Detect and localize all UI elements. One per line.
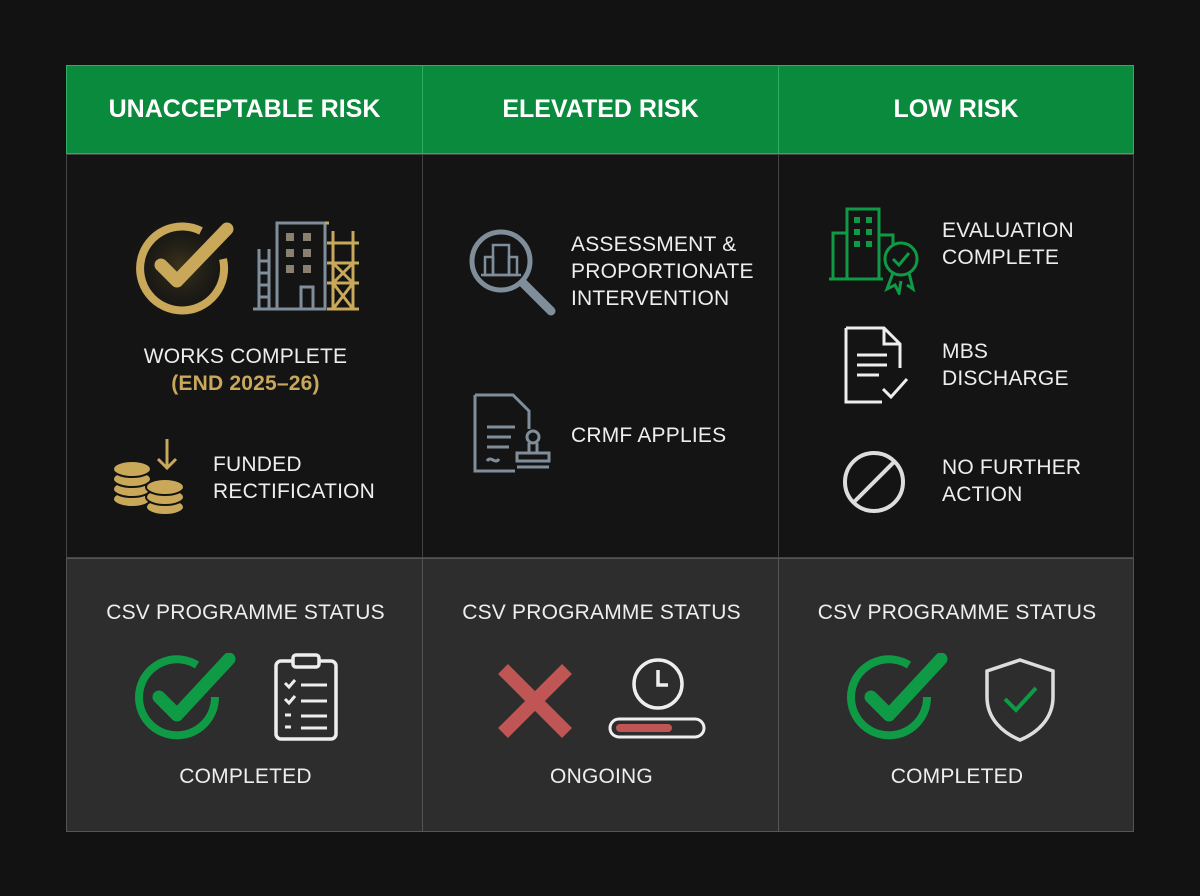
text: mbs discharge [942,340,1069,390]
text: funded rectification: RECTIFICATION [213,480,375,503]
icon: red cross [498,664,572,738]
text: assessment [571,233,754,310]
text: assessment: PROPORTIONATE [571,260,754,283]
panel: status elevated [422,558,779,832]
icon: clipboard [274,653,338,741]
text: funded rectification: FUNDED [213,453,302,476]
header: elevated risk: ELEVATED RISK [502,95,699,123]
icon: document check [844,326,908,404]
text: crmf applies: CRMF APPLIES [571,424,726,447]
text: completed: COMPLETED [179,765,312,788]
panel: low risk [778,154,1134,558]
panel: status low [778,558,1134,832]
header: low risk: LOW RISK [894,95,1018,123]
icon: green check [847,653,948,740]
text: assessment: INTERVENTION [571,287,729,310]
text: mbs discharge: DISCHARGE [942,367,1069,390]
text: funded rectification [213,453,375,503]
icon: no entry [843,451,905,513]
header: unacceptable risk [66,65,423,154]
text: works complete [144,345,347,395]
header: elevated risk [422,65,779,154]
text: no further action: ACTION [942,483,1023,506]
panel: status unacceptable [66,558,423,832]
panel: elevated risk [422,154,779,558]
icon: magnifier building [470,230,556,316]
text: evaluation complete: EVALUATION [942,219,1074,242]
icon: document stamp [474,394,550,472]
text: ongoing: ONGOING [550,765,653,788]
text: mbs discharge: MBS [942,340,988,363]
text: works complete: WORKS COMPLETE [144,345,347,368]
header: unacceptable risk: UNACCEPTABLE RISK [109,95,380,123]
text: status heading: CSV PROGRAMME STATUS [462,601,741,624]
text: no further action: NO FURTHER [942,456,1081,479]
text: completed: COMPLETED [891,765,1023,788]
text: no further action [942,456,1081,506]
text: evaluation complete [942,219,1074,269]
text: works complete: (END 2025–26) [171,372,320,395]
icon: gold check circle [136,222,234,314]
text: assessment: ASSESSMENT & [571,233,736,256]
icon: green building badge [829,208,918,295]
text: evaluation complete: COMPLETE [942,246,1059,269]
icon: green check [135,653,236,740]
header: low risk [778,65,1134,154]
text: status heading: CSV PROGRAMME STATUS [106,601,385,624]
icon: clock progress [608,658,706,738]
icon: building with scaffold [253,222,359,310]
icon: coins [114,439,183,514]
text: status heading: CSV PROGRAMME STATUS [818,601,1096,624]
panel: unacceptable risk [66,154,423,558]
icon: shield check [985,658,1055,742]
